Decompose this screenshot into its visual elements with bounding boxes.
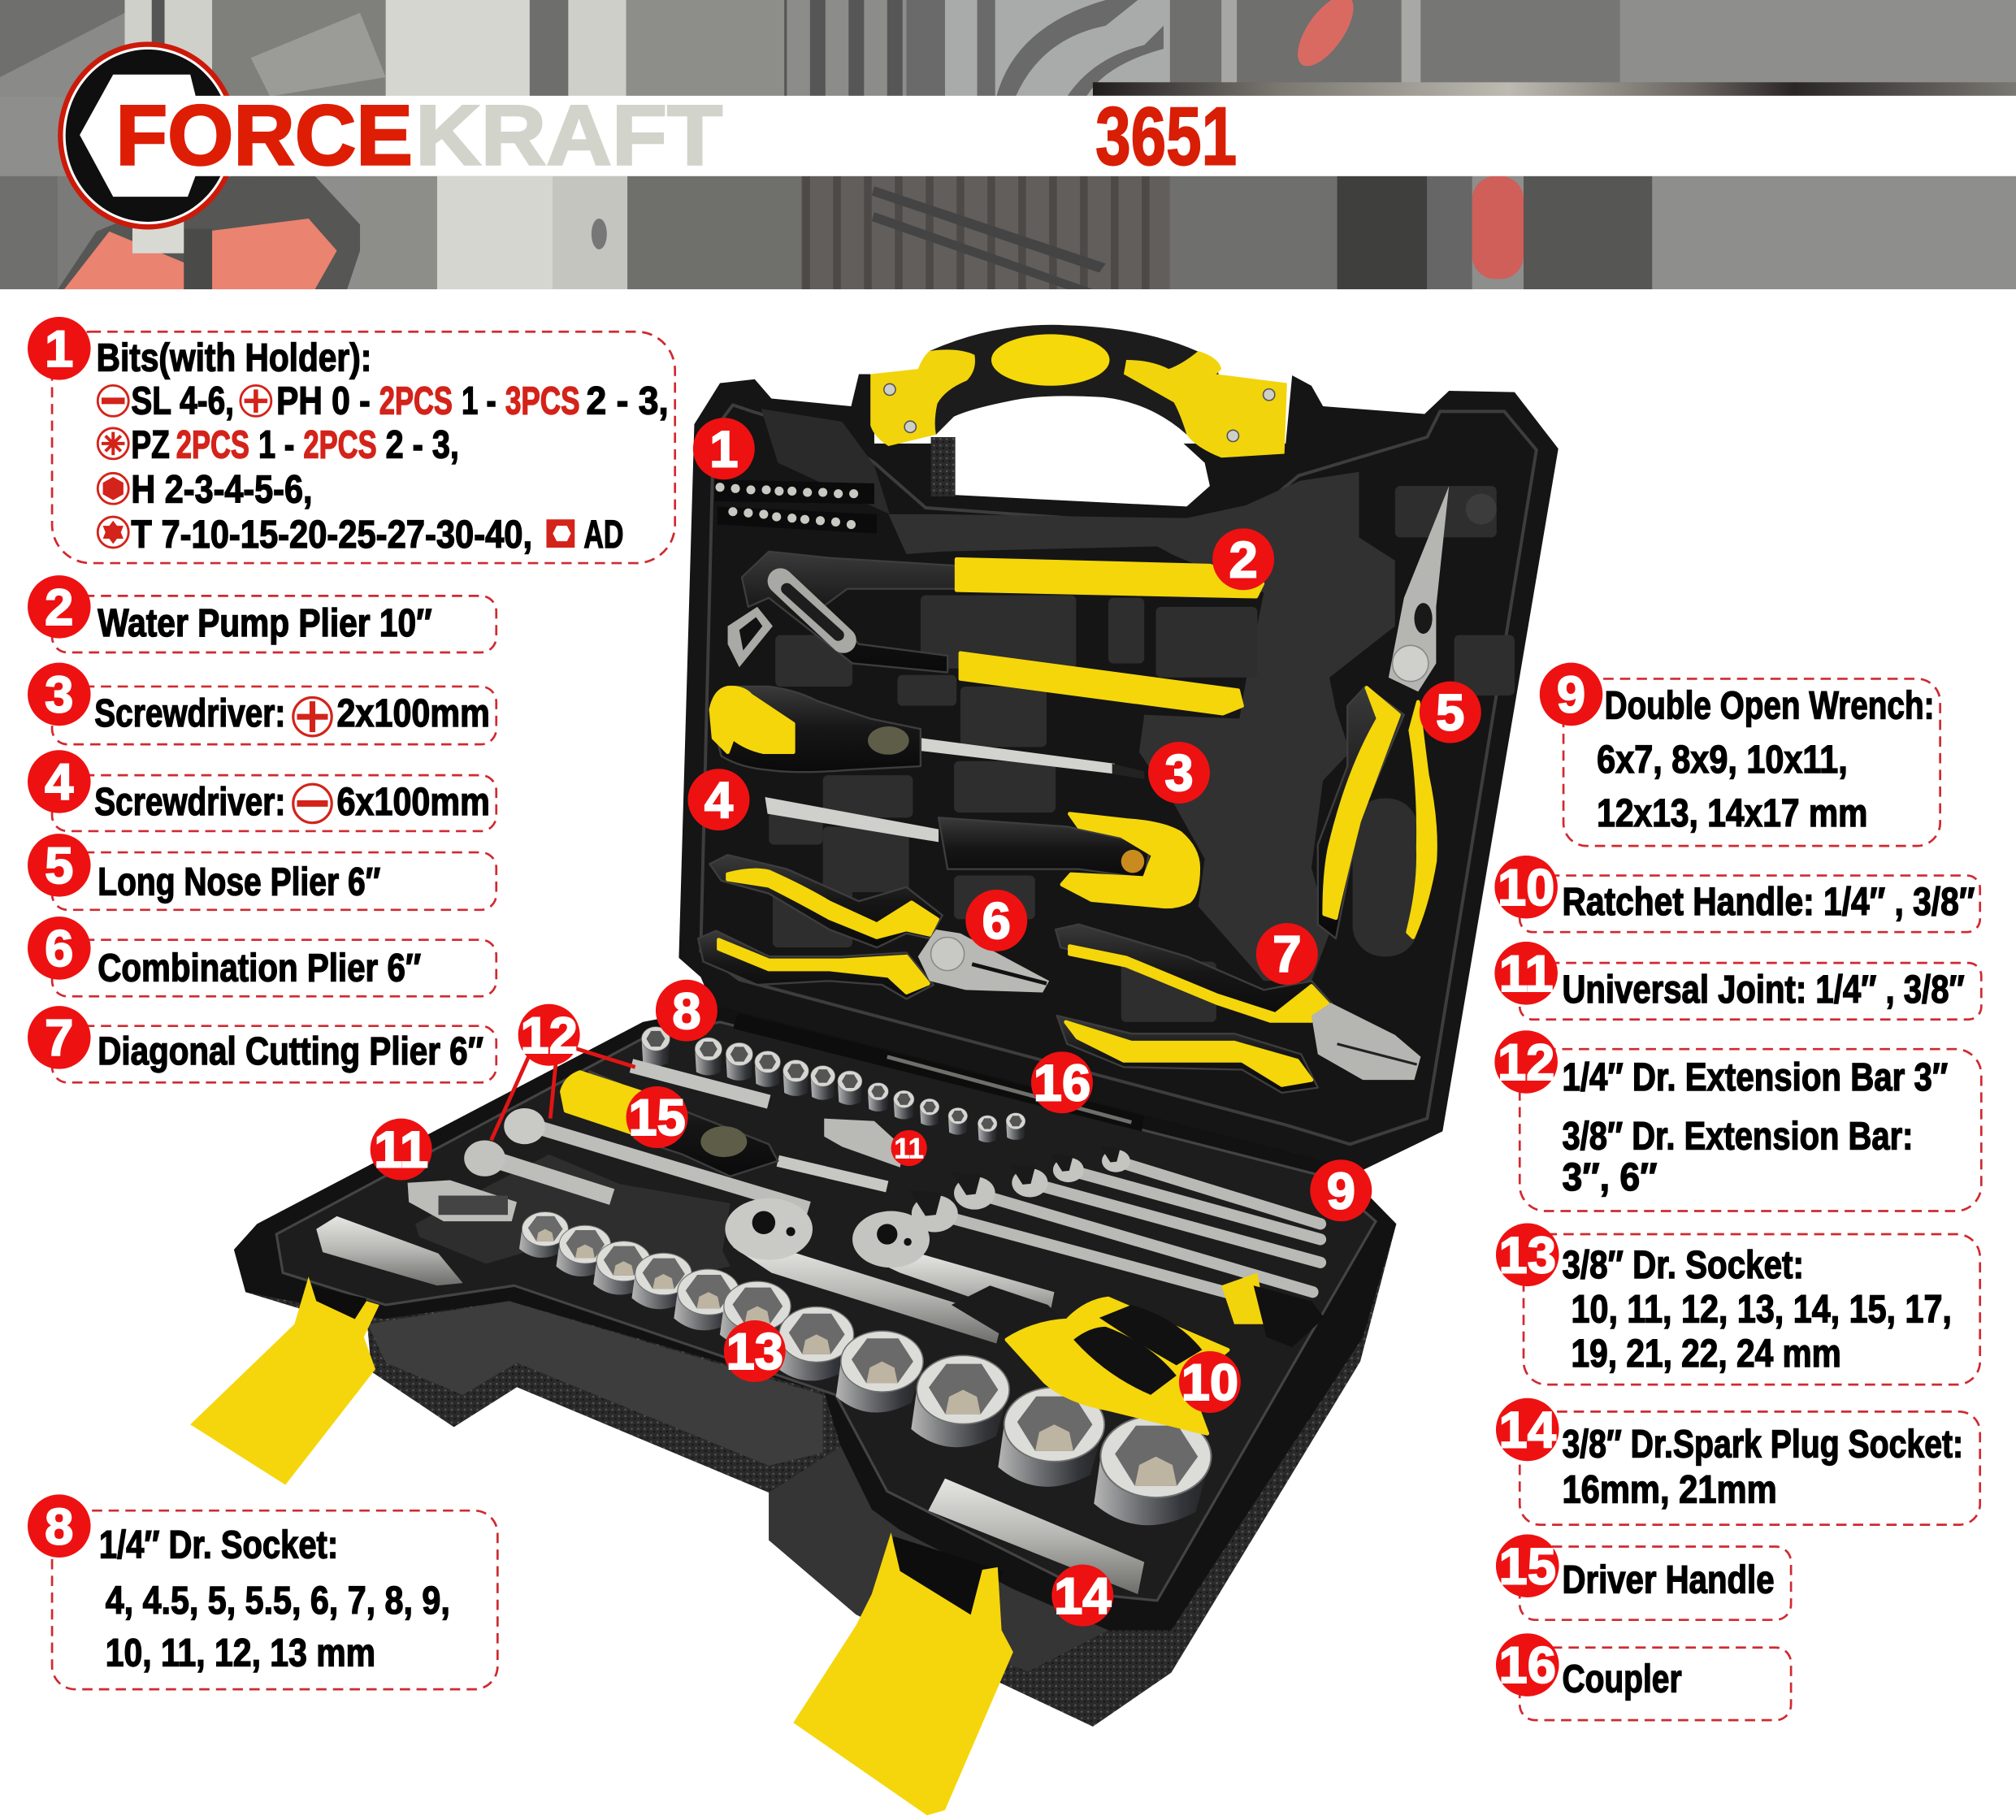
panel 15: driver handle [1496, 1534, 1791, 1620]
logo wordmark [115, 89, 722, 184]
badge 4: 4 [705, 772, 733, 829]
panel 5: long nose plier: Long Nose Plier 6″ [98, 860, 380, 904]
moulded foam blocks [769, 486, 1515, 1022]
panel 2: water pump plier [28, 575, 496, 652]
logo wordmark: KRAFT [415, 89, 722, 184]
badge 6 [965, 890, 1027, 951]
header photo banner [0, 0, 2016, 289]
universal joints [408, 1119, 904, 1221]
badge small 11: 11 [894, 1133, 924, 1165]
panel 3: screwdriver cross: 3 [45, 667, 73, 724]
handle opening [954, 400, 1210, 506]
panel 8: quarter inch sockets: 1/4″ Dr. Socket: [99, 1523, 338, 1567]
screwdriver slotted [765, 797, 1199, 907]
panel 6: combination plier [28, 916, 496, 996]
badge 8 [656, 980, 718, 1042]
icon: phillips [241, 385, 271, 416]
large grey moulded panel [888, 472, 1395, 981]
panel 4: screwdriver slotted: 4 [45, 754, 73, 811]
badge 6: 6 [982, 893, 1011, 950]
hinge rail [733, 1013, 1144, 1131]
panel 1: bits: 2 - 3, [386, 422, 459, 466]
badge 4 [688, 769, 749, 830]
foam centre block [415, 1155, 731, 1276]
badge 9 [1310, 1159, 1372, 1221]
icon: slot [98, 385, 128, 416]
panel 15: driver handle: 15 [1499, 1538, 1556, 1595]
panel 1: bits: 2PCS [379, 379, 453, 423]
screwdriver cross [709, 687, 1144, 779]
panel 7: diagonal plier: 7 [45, 1010, 73, 1067]
panel 5: long nose plier [28, 834, 496, 910]
panel 14: spark plug socket: 14 [1499, 1402, 1556, 1459]
icon: torx [98, 517, 128, 548]
panel 3: screwdriver cross [28, 663, 496, 744]
panel 1: bits: 3PCS [505, 379, 580, 423]
panel 7: diagonal plier [28, 1006, 496, 1082]
badge 3: 3 [1164, 745, 1194, 802]
panel 1: bits [28, 317, 675, 563]
panel 9: wrenches: 12x13, 14x17 mm [1597, 791, 1867, 835]
panel 8: quarter inch sockets [28, 1494, 497, 1689]
case callout badges [371, 418, 1481, 1627]
badge 14: 14 [1054, 1568, 1111, 1625]
carry handle [870, 325, 1287, 457]
panel 4: screwdriver slotted: Screwdriver: [94, 780, 285, 824]
panel 12: extension bars [1494, 1030, 1981, 1211]
panel 4: screwdriver slotted: 6x100mm [337, 780, 490, 824]
panel 16: coupler [1496, 1633, 1791, 1720]
panel 1: bits: T 7-10-15-20-25-27-30-40, [131, 513, 532, 557]
panel 1: bits: PZ [131, 422, 170, 466]
panel 4: screwdriver slotted [28, 750, 496, 831]
badge 9: 9 [1327, 1163, 1355, 1220]
panel 1: bits: H 2-3-4-5-6, [131, 468, 312, 512]
open end wrenches [909, 1146, 1320, 1305]
panel 8: quarter inch sockets: 4, 4.5, 5, 5.5, 6, 7, 8, 9, [106, 1579, 450, 1623]
panel 14: spark plug socket [1496, 1398, 1980, 1525]
panel 10: ratchet: 10 [1498, 860, 1554, 916]
panel 7: diagonal plier: Diagonal Cutting Plier 6″ [98, 1029, 483, 1073]
badge 3 [1148, 742, 1210, 804]
panel 10: ratchet [1494, 856, 1980, 932]
badge 8: 8 [672, 983, 701, 1040]
combination plier [698, 855, 1049, 999]
large loose socket [316, 1216, 463, 1285]
badge 10: 10 [1181, 1354, 1238, 1411]
case base [234, 1007, 1396, 1727]
dark gradient accent bar [1093, 82, 2016, 96]
extension bars [464, 1066, 809, 1208]
panel 13: three eighth sockets: 3/8″ Dr. Socket: [1562, 1243, 1804, 1287]
case lid [679, 374, 1559, 1176]
badge 2 [1212, 528, 1274, 590]
panel 1: bits: 1 - [258, 422, 294, 466]
panel 11: universal joint [1494, 942, 1981, 1020]
extension bar pointer lines [491, 1042, 635, 1141]
panel 1: bits: 1 - [462, 379, 496, 423]
icon: hex [98, 473, 128, 504]
logo emblem [58, 41, 238, 229]
bit sets [715, 479, 877, 534]
panel 11: universal joint: 11 [1499, 946, 1554, 1003]
icon: pozidriv [98, 428, 128, 459]
badge 1 [693, 418, 755, 479]
panel 1: bits: 1 [45, 321, 73, 378]
panel 13: three eighth sockets: 13 [1499, 1227, 1556, 1284]
panel 1: bits: AD [583, 513, 623, 557]
panel 5: long nose plier: 5 [45, 838, 73, 895]
panel 16: coupler: 16 [1499, 1637, 1556, 1694]
panel 16: coupler: Coupler [1562, 1657, 1682, 1701]
panel 9: wrenches: Double Open Wrench: [1605, 684, 1935, 728]
panel 1: bits: 2PCS [303, 422, 377, 466]
badge 13: 13 [726, 1324, 783, 1380]
panel 6: combination plier: 6 [45, 921, 73, 977]
icon: slot [293, 784, 332, 823]
panel 12: extension bars: 3/8″ Dr. Extension Bar: [1562, 1115, 1913, 1159]
panel 6: combination plier: Combination Plier 6″ [98, 946, 421, 990]
badge 7 [1256, 923, 1318, 985]
quarter inch sockets [642, 1027, 1025, 1142]
panel 14: spark plug socket: 16mm, 21mm [1562, 1468, 1777, 1512]
panel 1: bits: Bits(with Holder): [97, 336, 371, 380]
left latch [190, 1276, 379, 1485]
panel 12: extension bars: 12 [1498, 1034, 1554, 1091]
red knob in banner photo [1287, 0, 1364, 75]
panel 3: screwdriver cross: 2x100mm [337, 691, 490, 735]
badge 15: 15 [628, 1090, 686, 1146]
logo wordmark: FORCE [115, 89, 413, 184]
model number: 3651 [1095, 91, 1237, 183]
panel 12: extension bars: 1/4″ Dr. Extension Bar 3″ [1562, 1055, 1948, 1099]
badge 16: 16 [1034, 1055, 1090, 1112]
three eighth sockets [519, 1212, 1211, 1525]
badge 11: 11 [374, 1122, 428, 1179]
long nose plier [1318, 486, 1449, 938]
panel 9: wrenches: 9 [1557, 667, 1585, 724]
panel 13: three eighth sockets: 19, 21, 22, 24 mm [1572, 1332, 1841, 1376]
spark plug socket [928, 1479, 1144, 1594]
panel 13: three eighth sockets: 10, 11, 12, 13, 14, 15, 17, [1572, 1287, 1952, 1331]
badge 1: 1 [709, 421, 738, 478]
right latch [793, 1532, 1013, 1815]
right latch hinge [887, 1536, 1003, 1623]
panel 1: bits: SL 4-6, [131, 379, 234, 423]
white title band [193, 96, 2016, 176]
panel 1: bits: 2PCS [176, 422, 249, 466]
panel 8: quarter inch sockets: 8 [45, 1498, 73, 1555]
open tool case illustration [190, 325, 1559, 1815]
badge 7: 7 [1272, 926, 1301, 983]
panel 1: bits: 2 - 3, [587, 379, 669, 423]
panel 2: water pump plier: 2 [45, 579, 73, 636]
wrench end [1221, 1272, 1324, 1347]
panel 13: three eighth sockets [1496, 1224, 1980, 1384]
water pump plier [728, 552, 1263, 713]
icon: phillips [293, 697, 332, 736]
panel 1: bits: PH 0 - [276, 379, 371, 423]
panel 15: driver handle: Driver Handle [1562, 1558, 1775, 1601]
panel 9: wrenches [1540, 663, 1940, 846]
panel 8: quarter inch sockets: 10, 11, 12, 13 mm [106, 1632, 375, 1675]
diagonal cutting plier [1056, 925, 1420, 1093]
left latch hinge [303, 1285, 366, 1331]
panel 12: extension bars: 3″, 6″ [1562, 1155, 1658, 1199]
badge 5: 5 [1436, 685, 1464, 742]
badge 5 [1420, 682, 1481, 743]
panel 2: water pump plier: Water Pump Plier 10″ [98, 601, 432, 645]
driver handle [561, 1071, 887, 1186]
panel 3: screwdriver cross: Screwdriver: [94, 691, 285, 735]
ratchet handles [725, 1198, 1228, 1433]
badge 2: 2 [1229, 531, 1258, 588]
panel 9: wrenches: 6x7, 8x9, 10x11, [1597, 738, 1848, 782]
icon: adapter [546, 519, 574, 548]
badge 12: 12 [520, 1008, 578, 1064]
